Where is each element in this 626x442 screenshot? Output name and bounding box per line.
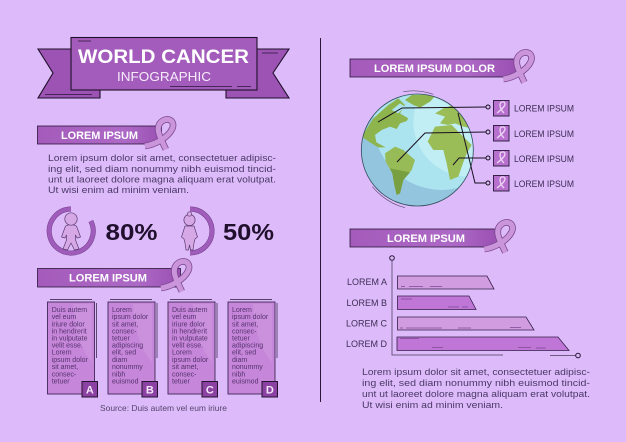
card B bbox=[108, 300, 158, 397]
legend item 3: LOREM IPSUM bbox=[514, 154, 574, 164]
section header: lorem ipsum dolor: LOREM IPSUM DOLOR bbox=[374, 63, 495, 75]
card A: consec- bbox=[52, 371, 77, 378]
icon: awareness ribbon bbox=[484, 222, 513, 252]
icon: awareness ribbon bbox=[503, 52, 532, 82]
legend item 4: LOREM IPSUM bbox=[514, 179, 574, 189]
value: 80%: 80% bbox=[106, 219, 158, 245]
card B: Lorem bbox=[112, 307, 132, 314]
section header: lorem ipsum 3: LOREM IPSUM bbox=[387, 233, 465, 245]
card D: euismod bbox=[232, 378, 259, 385]
card D: diam bbox=[232, 357, 247, 364]
card B: diam bbox=[112, 357, 127, 364]
card B: elit, sed bbox=[112, 350, 136, 357]
card B: consec- bbox=[112, 328, 137, 335]
text block: closing paragraph: Ut wisi enim ad minim veniam. bbox=[362, 400, 503, 411]
card A: iriure dolor bbox=[52, 321, 85, 328]
card B: nibh bbox=[112, 371, 125, 378]
text block: closing paragraph bbox=[362, 367, 590, 411]
text block: closing paragraph: ing elit, sed diam nonummy nibh euismod tincid- bbox=[362, 378, 590, 389]
card D: sit amet, bbox=[232, 321, 259, 328]
card C: iriure dolor bbox=[172, 321, 206, 328]
card D: tetuer bbox=[232, 336, 251, 343]
stat: 50 percent donut bbox=[182, 209, 274, 253]
card D bbox=[228, 300, 278, 397]
legend item 1: LOREM IPSUM bbox=[514, 104, 574, 114]
badge B: B bbox=[146, 384, 154, 396]
text block: intro paragraph bbox=[48, 153, 276, 196]
bar C: LOREM C bbox=[346, 318, 387, 328]
legend item 2: LOREM IPSUM bbox=[514, 129, 574, 139]
card D: Lorem bbox=[232, 307, 252, 314]
right ribbon tail bbox=[226, 49, 289, 98]
badge D: D bbox=[266, 384, 274, 396]
badge A: A bbox=[86, 384, 94, 396]
card B: nonummy bbox=[112, 364, 143, 371]
bar C bbox=[346, 317, 534, 330]
legend item 1 bbox=[494, 100, 574, 116]
text block: closing paragraph: unt ut laoreet dolore magna aliquam erat volutpat. bbox=[362, 389, 590, 400]
title plate bbox=[71, 38, 257, 90]
bar B bbox=[346, 296, 476, 310]
section header: lorem ipsum 1 bbox=[38, 119, 173, 149]
left ribbon tail bbox=[38, 49, 100, 98]
legend item 2 bbox=[494, 126, 574, 141]
subtitle text: INFOGRAPHIC bbox=[117, 69, 211, 84]
icon: awareness ribbon bbox=[145, 119, 173, 149]
text block: intro paragraph: Lorem ipsum dolor sit amet, consectetuer adipisc- bbox=[48, 153, 276, 164]
card D: consec- bbox=[232, 328, 257, 335]
card D: ipsum dolor bbox=[232, 314, 269, 321]
card A: tetuer bbox=[52, 378, 70, 385]
value: 50%: 50% bbox=[223, 219, 274, 245]
section header: lorem ipsum 2 bbox=[38, 261, 189, 291]
card A: Duis autem bbox=[52, 307, 87, 314]
card A: vel eum bbox=[52, 314, 76, 321]
card C: in vulputate bbox=[172, 336, 208, 343]
card A: in hendrerit bbox=[52, 328, 87, 335]
bar A bbox=[347, 276, 494, 289]
icon: female figure bbox=[182, 212, 198, 250]
section header: lorem ipsum 1: LOREM IPSUM bbox=[61, 130, 138, 142]
bar D: LOREM D bbox=[346, 339, 387, 349]
globe bbox=[360, 90, 474, 208]
card C: vel eum bbox=[172, 314, 197, 321]
card C: velit esse. bbox=[172, 343, 203, 350]
badge C: C bbox=[206, 384, 214, 396]
section header: lorem ipsum 3 bbox=[350, 222, 513, 252]
legend item 4 bbox=[494, 176, 574, 191]
title banner bbox=[38, 38, 289, 98]
card A bbox=[48, 300, 98, 397]
card B: tetuer bbox=[112, 336, 131, 343]
leader lines bbox=[378, 105, 490, 185]
source note: Source: Duis autem vel eum iriure bbox=[100, 403, 227, 413]
stat: 80 percent donut bbox=[49, 209, 158, 253]
text block: intro paragraph: ing elit, sed diam nonummy nibh euismod tincid- bbox=[48, 164, 276, 175]
section header: lorem ipsum dolor bbox=[350, 52, 532, 82]
card D: nibh bbox=[232, 371, 245, 378]
card C: Duis autem bbox=[172, 307, 208, 314]
card D: elit, sed bbox=[232, 350, 256, 357]
text block: intro paragraph: Ut wisi enim ad minim veniam. bbox=[48, 185, 189, 196]
card C: consec- bbox=[172, 371, 197, 378]
card B: ipsum dolor bbox=[112, 314, 149, 321]
bar B: LOREM B bbox=[346, 298, 387, 308]
card A: velit esse. bbox=[52, 343, 83, 350]
card D: nonummy bbox=[232, 364, 263, 371]
bar D bbox=[346, 337, 569, 350]
text block: closing paragraph: Lorem ipsum dolor sit amet, consectetuer adipisc- bbox=[362, 367, 590, 378]
icon: child figure bbox=[62, 213, 80, 250]
card C: sit amet, bbox=[172, 364, 199, 371]
bar A: LOREM A bbox=[347, 277, 387, 287]
card D: adipiscing bbox=[232, 343, 263, 350]
card C: Lorem bbox=[172, 350, 192, 357]
card A: Lorem bbox=[52, 350, 72, 357]
icon: awareness ribbon bbox=[161, 261, 189, 291]
section header: lorem ipsum 2: LOREM IPSUM bbox=[69, 272, 147, 284]
bar chart bbox=[346, 256, 580, 358]
card B: euismod bbox=[112, 378, 139, 385]
card C: ipsum dolor bbox=[172, 357, 209, 364]
title text: WORLD CANCER bbox=[78, 47, 249, 68]
card B: sit amet, bbox=[112, 321, 139, 328]
text block: intro paragraph: unt ut laoreet dolore magna aliquam erat volutpat. bbox=[48, 174, 276, 186]
card C bbox=[168, 300, 218, 397]
card A: in vulputate bbox=[52, 336, 88, 343]
card A: ipsum dolor bbox=[52, 357, 89, 364]
card A: sit amet, bbox=[52, 364, 78, 371]
card B: adipiscing bbox=[112, 343, 143, 350]
legend item 3 bbox=[494, 150, 574, 166]
card C: tetuer bbox=[172, 378, 191, 385]
card C: in hendrerit bbox=[172, 328, 207, 335]
